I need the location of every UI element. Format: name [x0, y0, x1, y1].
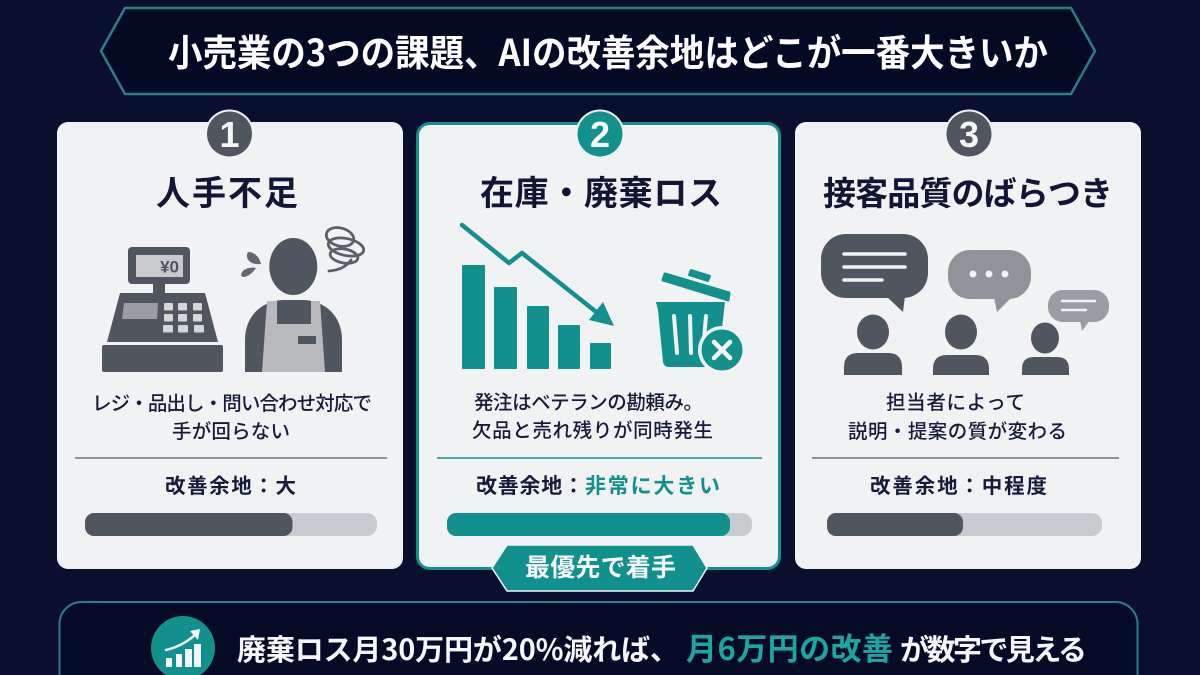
progress bar 3 — [827, 513, 1102, 536]
description 1: レジ・品出し・問い合わせ対応で — [92, 387, 372, 416]
panel: bottom conclusion — [60, 602, 1138, 675]
icon: cash register — [102, 247, 223, 372]
heading: inventory loss: 在庫・廃棄ロス — [480, 166, 722, 215]
badge 3 — [944, 110, 994, 158]
improvement label 2 — [476, 470, 720, 500]
icon: growth chart — [151, 616, 215, 675]
badge 2 — [576, 110, 624, 158]
chart: declining bars — [462, 225, 614, 369]
conclusion text — [237, 624, 1087, 669]
description 1 — [92, 387, 372, 444]
panel: card 2 inventory loss — [418, 110, 780, 591]
improvement label 2: 非常に大きい — [585, 470, 720, 500]
icon: cash register: ¥0 — [160, 258, 179, 276]
icon: stressed clerk — [241, 225, 365, 372]
description 3 — [848, 386, 1067, 444]
heading: service quality: 接客品質のばらつき — [823, 167, 1113, 215]
improvement label 2: 改善余地： — [476, 470, 584, 500]
improvement label 1: 改善余地：大 — [165, 469, 296, 499]
badge 2: 2 — [590, 114, 610, 155]
progress bar 1 — [85, 513, 377, 536]
tag: top priority — [492, 545, 707, 591]
badge 3: 3 — [959, 114, 979, 155]
description 1: 手が回らない — [172, 415, 290, 444]
tag: top priority: 最優先で着手 — [525, 548, 676, 584]
icon: trash can with x — [656, 270, 746, 374]
description 3: 説明・提案の質が変わる — [848, 415, 1067, 444]
progress bar 2 — [447, 513, 752, 536]
conclusion text: 廃棄ロス月30万円が20%減れば、 — [237, 627, 679, 669]
description 3: 担当者によって — [886, 386, 1025, 415]
panel: card 3 service quality — [795, 110, 1141, 569]
description 2: 発注はベテランの勘頼み。 — [474, 386, 703, 415]
badge 1: 1 — [219, 114, 240, 155]
conclusion text: が数字で見える — [900, 627, 1087, 669]
badge 1 — [205, 110, 254, 158]
heading: labor shortage: 人手不足 — [156, 166, 298, 215]
improvement label 3: 改善余地：中程度 — [870, 469, 1047, 499]
conclusion text: 月6万円の改善 — [686, 624, 893, 669]
icon: speech bubbles and staff — [821, 234, 1109, 375]
panel: card 1 labor shortage — [57, 110, 403, 569]
description 2: 欠品と売れ残りが同時発生 — [472, 414, 713, 443]
title banner — [101, 8, 1095, 94]
description 2 — [472, 386, 713, 443]
title banner: 小売業の3つの課題、AIの改善余地はどこが一番大きいか — [168, 23, 1048, 77]
